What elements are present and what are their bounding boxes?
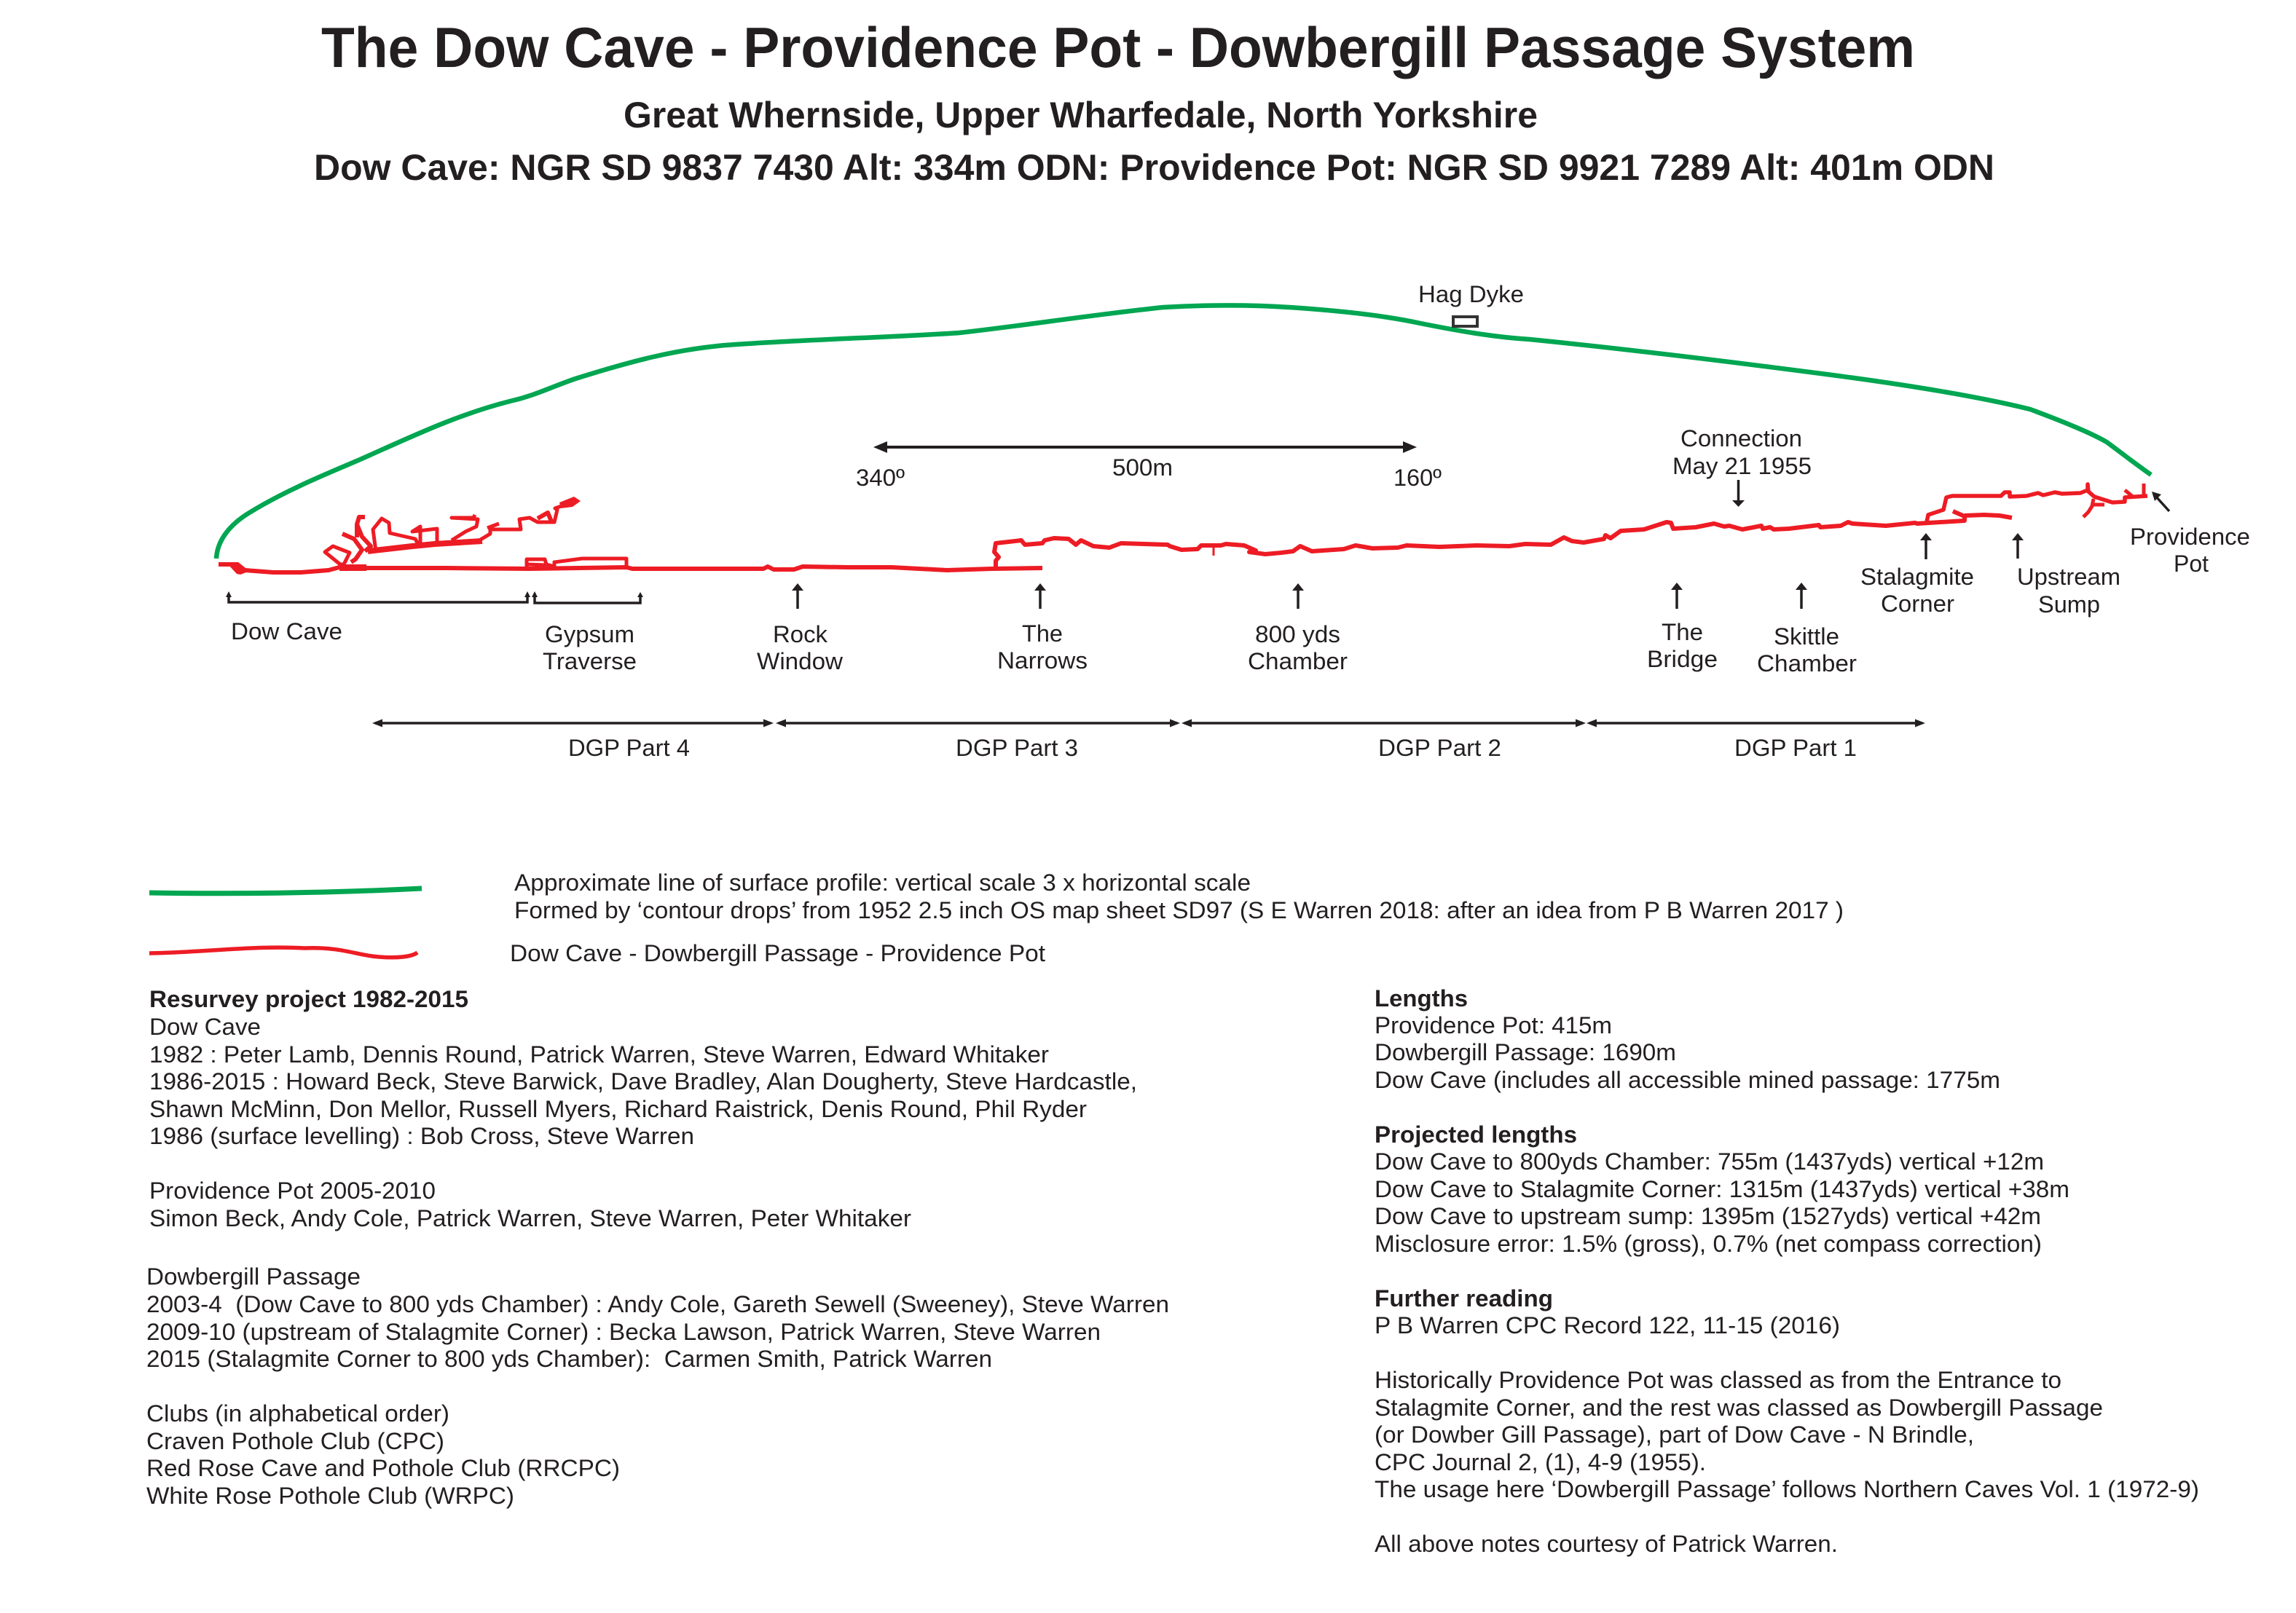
Dow Cave upper series	[325, 497, 581, 564]
Gypsum Traverse loop	[527, 559, 626, 568]
marker: Rock Window	[757, 583, 844, 674]
marker: Skittle Chamber: Skittle	[1774, 623, 1839, 650]
text block: projected lengths: Dow Cave to 800yds Chamber: 755m (1437yds) vertical +12m	[1375, 1148, 2044, 1175]
marker: Stalagmite Corner: Corner	[1881, 591, 1954, 617]
text block: projected lengths: Dow Cave to Stalagmite Corner: 1315m (1437yds) vertical +38m	[1375, 1176, 2069, 1202]
text block: clubs: Craven Pothole Club (CPC)	[146, 1428, 444, 1454]
DGP Part 3: DGP Part 3	[956, 735, 1078, 761]
main passage east section	[994, 511, 1965, 568]
text block: resurvey project: 1986-2015 : Howard Beck, Steve Barwick, Dave Bradley, Alan Dougherty, Steve Hardcastle,	[149, 1068, 1137, 1095]
text block: resurvey project: 1986 (surface levelling) : Bob Cross, Steve Warren	[149, 1123, 694, 1149]
main passage west section	[219, 564, 1042, 572]
DGP Part 3	[776, 719, 1180, 761]
callout: Connection May 21 1955	[1672, 425, 1812, 507]
legend: surface profile text: Approximate line of surface profile: vertical scale 3 x horizontal scale	[514, 869, 1251, 896]
upstream sump branch	[1965, 515, 2012, 518]
legend: cave line text: Dow Cave - Dowbergill Passage - Providence Pot	[510, 940, 1045, 966]
marker: 800 yds Chamber	[1248, 583, 1348, 674]
legend: green surface line	[149, 888, 422, 894]
text block: clubs	[146, 1400, 620, 1509]
text block: lengths: Lengths	[1375, 985, 1468, 1011]
marker: Rock Window: Rock	[773, 621, 828, 647]
Hag Dyke building marker	[1453, 317, 1477, 326]
text block: resurvey project: Shawn McMinn, Don Mellor, Russell Myers, Richard Raistrick, Denis Round, Phil Ryder	[149, 1096, 1087, 1122]
bracket: Dow Cave	[226, 591, 530, 644]
DGP Part 2	[1182, 719, 1586, 761]
scale arrow 500m	[856, 441, 1442, 491]
text block: Dowbergill Passage: Dowbergill Passage	[146, 1263, 361, 1290]
junction blob	[339, 564, 366, 571]
text block: Dowbergill Passage: 2015 (Stalagmite Corner to 800 yds Chamber): Carmen Smith, Patrick Warren	[146, 1346, 992, 1372]
text block: resurvey project: Resurvey project 1982-2015	[149, 986, 468, 1012]
marker: 800 yds Chamber: 800 yds	[1255, 621, 1340, 647]
legend	[149, 869, 1844, 966]
text block: lengths: Dowbergill Passage: 1690m	[1375, 1039, 1676, 1065]
text block: further reading: Further reading	[1375, 1285, 1553, 1312]
subtitle: location: Great Whernside, Upper Wharfedale, North Yorkshire	[624, 95, 1538, 135]
marker: 800 yds Chamber: Chamber	[1248, 648, 1348, 674]
text block: resurvey project: Providence Pot 2005-2010	[149, 1178, 436, 1204]
text block: further reading: The usage here ‘Dowbergill Passage’ follows Northern Caves Vol. 1 (1972-9)	[1375, 1476, 2199, 1502]
text block: Dowbergill Passage: 2003-4 (Dow Cave to 800 yds Chamber) : Andy Cole, Gareth Sewell (Sweeney), Steve Warren	[146, 1291, 1169, 1317]
text block: resurvey project: 1982 : Peter Lamb, Dennis Round, Patrick Warren, Steve Warren, Edward Whitaker	[149, 1041, 1049, 1068]
marker: Upstream Sump	[2012, 533, 2120, 618]
entrance blob	[228, 564, 246, 575]
text block: projected lengths: Misclosure error: 1.5% (gross), 0.7% (net compass correction)	[1375, 1231, 2042, 1257]
marker: Upstream Sump: Sump	[2038, 591, 2100, 618]
surface profile line	[216, 305, 2151, 559]
marker: The Bridge: Bridge	[1647, 646, 1718, 672]
marker: The Narrows: The	[1022, 620, 1063, 647]
bracket: Gypsum Traverse: Traverse	[543, 648, 637, 674]
marker: Skittle Chamber: Chamber	[1757, 650, 1857, 677]
text block: resurvey project	[149, 986, 1137, 1231]
text block: resurvey project: Dow Cave	[149, 1014, 261, 1040]
text block: projected lengths	[1375, 1121, 2069, 1257]
marker: The Bridge: The	[1662, 619, 1703, 645]
red survey line: Dow Cave to Providence Pot	[219, 484, 2147, 575]
text block: clubs: White Rose Pothole Club (WRPC)	[146, 1483, 514, 1509]
callout: Connection May 21 1955: May 21 1955	[1672, 453, 1812, 479]
DGP Part 4: DGP Part 4	[568, 735, 690, 761]
marker: Stalagmite Corner: Stalagmite	[1860, 564, 1974, 590]
marker: The Narrows: Narrows	[997, 647, 1088, 674]
marker: Stalagmite Corner	[1860, 533, 1974, 617]
text block: further reading: Historically Providence Pot was classed as from the Entrance to	[1375, 1367, 2061, 1393]
text block: lengths	[1375, 985, 2000, 1093]
bracket: Dow Cave: Dow Cave	[231, 618, 342, 644]
chart: cave profile	[216, 281, 2250, 761]
scale arrow 500m: 500m	[1112, 454, 1173, 481]
DGP Part 1: DGP Part 1	[1734, 735, 1857, 761]
DGP part arrows	[372, 719, 1925, 761]
text block: clubs: Red Rose Cave and Pothole Club (RRCPC)	[146, 1455, 620, 1481]
DGP Part 1	[1587, 719, 1925, 761]
title block	[314, 15, 1994, 188]
text block: lengths: Providence Pot: 415m	[1375, 1012, 1612, 1038]
text block: further reading: P B Warren CPC Record 122, 11-15 (2016)	[1375, 1312, 1840, 1338]
marker: Providence Pot: Pot	[2174, 551, 2209, 577]
small spike	[1212, 543, 1215, 556]
bracket: Gypsum Traverse	[532, 591, 643, 674]
callout: Connection May 21 1955: Connection	[1680, 425, 1802, 451]
scale arrow 500m: 340º	[856, 465, 905, 491]
text block: lengths: Dow Cave (includes all accessible mined passage: 1775m	[1375, 1067, 2000, 1093]
marker: Providence Pot	[2130, 492, 2250, 577]
text block: Dowbergill Passage: 2009-10 (upstream of Stalagmite Corner) : Becka Lawson, Patrick Warren, Steve Warren	[146, 1319, 1101, 1345]
scale arrow 500m: 160º	[1393, 465, 1442, 491]
text block: further reading: Stalagmite Corner, and the rest was classed as Dowbergill Passage	[1375, 1395, 2103, 1421]
Providence Pot series	[1927, 484, 2147, 522]
marker: Upstream Sump: Upstream	[2017, 564, 2120, 590]
marker: Providence Pot: Providence	[2130, 524, 2250, 550]
bracket: Gypsum Traverse: Gypsum	[545, 621, 634, 647]
label: Hag Dyke: Hag Dyke	[1418, 281, 1524, 307]
DGP Part 2: DGP Part 2	[1378, 735, 1501, 761]
text block: resurvey project: Simon Beck, Andy Cole, Patrick Warren, Steve Warren, Peter Whitaker	[149, 1205, 911, 1231]
text block: Dowbergill Passage	[146, 1263, 1169, 1372]
text block: further reading: CPC Journal 2, (1), 4-9 (1955).	[1375, 1449, 1706, 1475]
title: The Dow Cave - Providence Pot - Dowbergill Passage System	[321, 15, 1915, 79]
marker: The Narrows	[997, 583, 1088, 674]
text block: further reading	[1375, 1285, 2199, 1557]
legend: surface profile text	[514, 869, 1844, 923]
marker: Skittle Chamber	[1757, 583, 1857, 677]
text block: further reading: (or Dowber Gill Passage), part of Dow Cave - N Brindle,	[1375, 1421, 1974, 1448]
text block: projected lengths: Projected lengths	[1375, 1121, 1577, 1148]
marker: Rock Window: Window	[757, 648, 844, 674]
DGP Part 4	[372, 719, 774, 761]
legend: surface profile text: Formed by ‘contour drops’ from 1952 2.5 inch OS map sheet SD97 (S E Warren 2018: after an idea from P B Warren 2017 )	[514, 897, 1844, 923]
marker: The Bridge	[1647, 583, 1718, 672]
legend: red cave line	[149, 947, 417, 958]
text block: further reading: All above notes courtesy of Patrick Warren.	[1375, 1531, 1838, 1557]
subtitle: grid references: Dow Cave: NGR SD 9837 7430 Alt: 334m ODN: Providence Pot: NGR SD 9921 7289 Alt: 401m ODN	[314, 147, 1994, 188]
text block: projected lengths: Dow Cave to upstream sump: 1395m (1527yds) vertical +42m	[1375, 1203, 2041, 1229]
text block: clubs: Clubs (in alphabetical order)	[146, 1400, 449, 1427]
